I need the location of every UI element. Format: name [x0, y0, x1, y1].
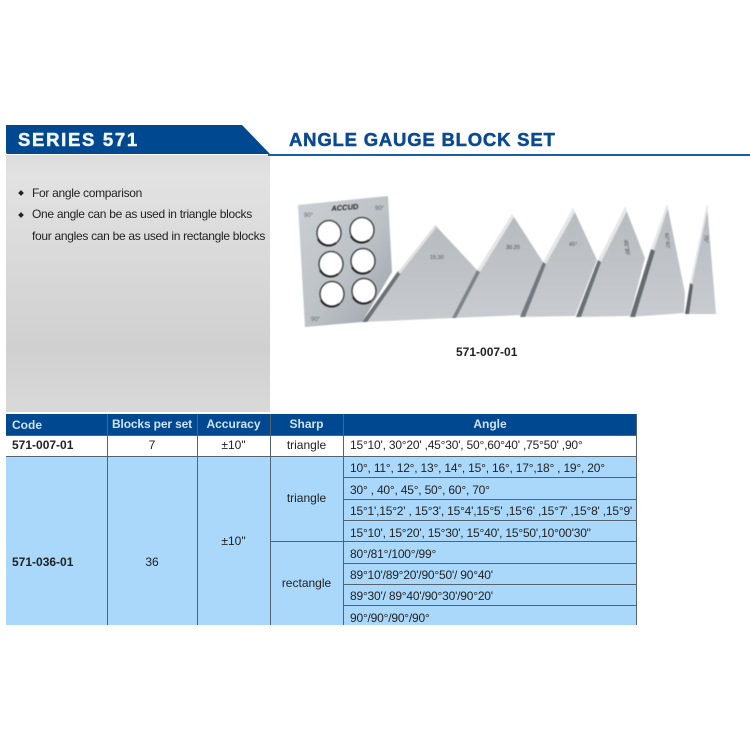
row: 571-036-01: 36	[145, 555, 159, 569]
triangle blocks: 45°	[569, 242, 577, 248]
row: 571-036-01: 15°1',15°2' , 15°3', 15°4',15°5' ,15°6' ,15°7' ,15°8' ,15°9'	[350, 504, 632, 518]
photo caption: 571-007-01	[456, 345, 517, 359]
rectangle block: ACCUD	[330, 202, 359, 213]
row: 571-036-01: 90°/90°/90°/90°	[350, 611, 430, 625]
row: 571-036-01: 89°10'/89°20'/90°50'/ 90°40'	[350, 568, 493, 582]
feature list: four angles can be as used in rectangle blocks	[32, 229, 265, 243]
row: 571-036-01: 30° , 40°, 45°, 50°, 60°, 70°	[350, 483, 490, 497]
triangle blocks: 30.20	[506, 245, 520, 251]
triangle blocks: 60°40'	[663, 233, 670, 249]
rectangle block: 90°	[304, 213, 314, 219]
table header row: Blocks per set	[112, 417, 192, 431]
row: 571-036-01: ±10"	[221, 534, 246, 548]
row: 571-036-01: 89°30'/ 89°40'/90°30'/90°20'	[350, 589, 493, 603]
table header row	[6, 414, 637, 435]
row: 571-036-01: 10°, 11°, 12°, 13°, 14°, 15°, 16°, 17°,18° , 19°, 20°	[350, 461, 605, 475]
side panel: features	[6, 155, 270, 412]
header tab: series	[6, 125, 750, 156]
table header row: Sharp	[289, 417, 324, 431]
triangle blocks: 15.30	[430, 255, 444, 261]
row: 571-036-01: 571-036-01	[12, 555, 73, 569]
rectangle block: 90°	[375, 206, 385, 212]
triangle blocks: 45°30'	[622, 239, 630, 256]
row: 571-036-01	[12, 461, 632, 625]
row: 571-036-01: 15°10', 15°20', 15°30', 15°40', 15°50',10°00'30"	[350, 526, 591, 540]
row: 571-007-01	[6, 435, 637, 456]
table header row: Angle	[473, 417, 507, 431]
product title: ANGLE GAUGE BLOCK SET	[289, 129, 556, 150]
feature list: For angle comparison	[32, 186, 142, 200]
row: 571-007-01: triangle	[287, 438, 326, 452]
row: 571-036-01: triangle	[287, 491, 326, 505]
row: 571-007-01: 15°10', 30°20' ,45°30', 50°,60°40' ,75°50' ,90°	[350, 438, 582, 452]
row: 571-007-01: ±10"	[221, 438, 246, 452]
table header row: Code	[12, 418, 42, 432]
rectangle block	[298, 196, 392, 327]
triangle blocks	[362, 204, 716, 322]
rectangle block: 90°	[311, 317, 321, 323]
series heading: SERIES 571	[18, 129, 139, 150]
row: 571-007-01: 7	[149, 438, 155, 452]
specification table	[6, 414, 637, 625]
row: 571-036-01: 80°/81°/100°/99°	[350, 547, 436, 561]
row: 571-036-01: rectangle	[282, 576, 331, 590]
table header row: Accuracy	[206, 417, 261, 431]
feature list	[18, 186, 265, 243]
row: 571-007-01: 571-007-01	[12, 438, 73, 452]
feature list: One angle can be as used in triangle blocks	[32, 207, 252, 221]
product photo: angle gauge blocks	[298, 196, 716, 328]
triangle blocks: 75°	[702, 235, 709, 243]
